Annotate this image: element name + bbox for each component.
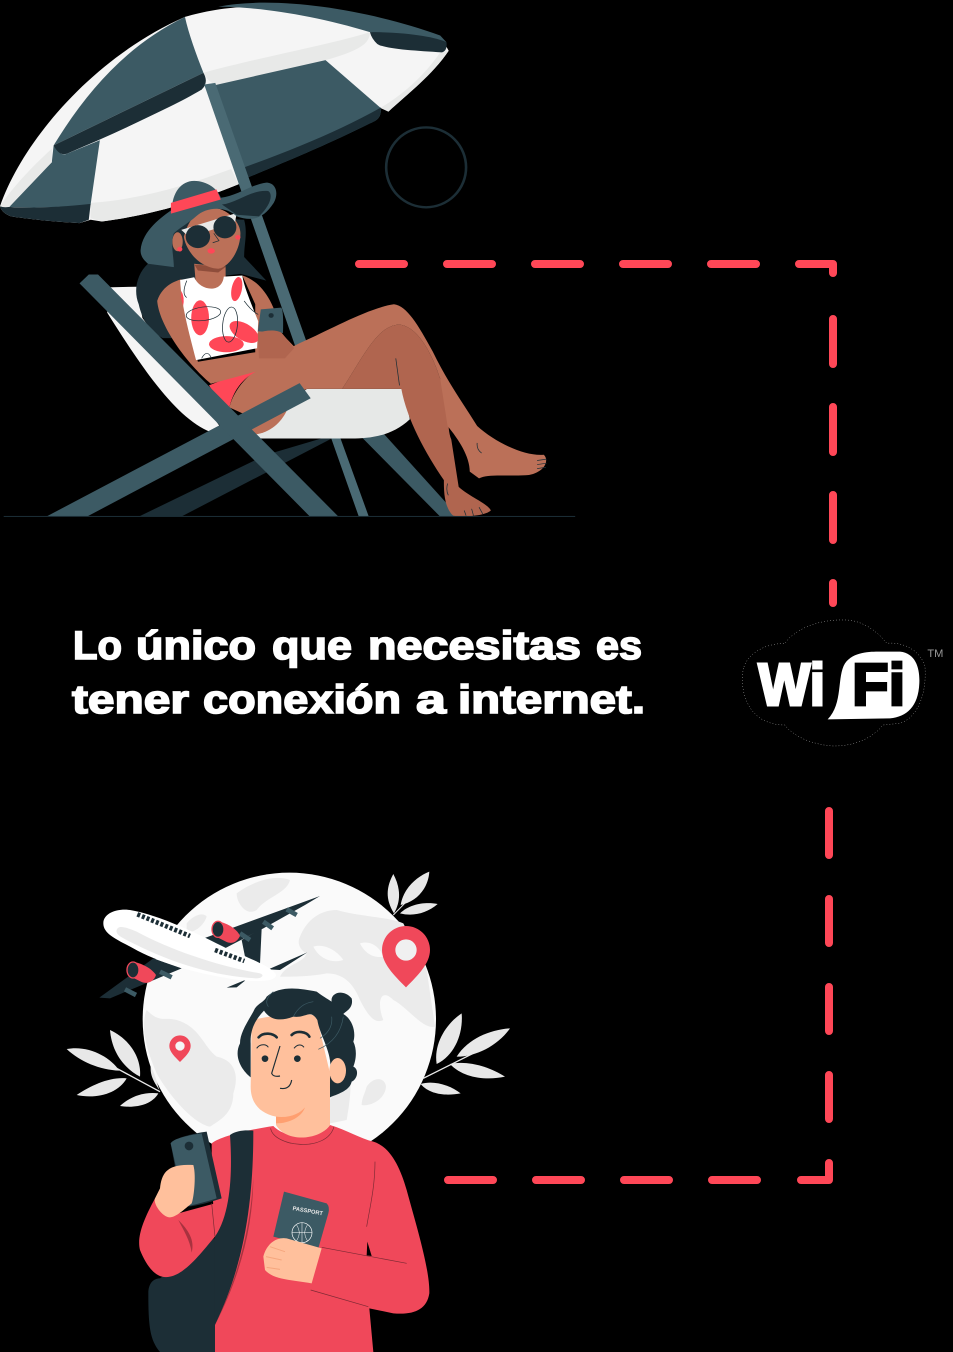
headline: es — [596, 624, 642, 668]
head — [238, 989, 357, 1138]
toes and leg details — [396, 358, 547, 516]
headline: Lo — [73, 624, 122, 668]
fuselage — [103, 910, 276, 981]
speech bubble — [828, 652, 919, 719]
leaves: left — [67, 1030, 160, 1107]
torso and arms — [157, 264, 294, 384]
headline: único — [136, 624, 256, 668]
pylons — [125, 909, 297, 995]
sun hat — [141, 181, 276, 267]
headline: tener — [72, 678, 189, 722]
swimsuit bottom — [209, 358, 272, 407]
umbrella pole — [204, 83, 369, 517]
icon: large location pin — [382, 926, 430, 987]
red sweater — [139, 1125, 429, 1352]
leaves: top right — [388, 872, 438, 915]
airplane — [99, 896, 320, 998]
umbrella canopy — [0, 3, 449, 223]
phone — [258, 308, 283, 333]
headline: conexión — [203, 678, 401, 722]
illustration: traveller with globe — [67, 872, 510, 1352]
globe — [143, 873, 436, 1166]
Wi: Wi — [758, 651, 825, 718]
trademark: TM — [927, 648, 943, 660]
hand holding phone — [258, 330, 294, 358]
chair seat cloth — [107, 287, 410, 439]
patterned top — [180, 276, 263, 360]
hand holding passport — [263, 1238, 322, 1283]
passport — [273, 1192, 329, 1248]
leaves: right — [421, 1013, 510, 1095]
headline: necesitas — [368, 624, 581, 668]
engines — [216, 922, 240, 943]
wings and tail — [190, 896, 320, 954]
dashed connector: bottom — [448, 811, 829, 1180]
icon: small location pin — [169, 1035, 191, 1062]
face features — [259, 1032, 309, 1037]
phone in hand — [171, 1132, 222, 1207]
hair — [136, 216, 266, 338]
chair main bar — [80, 275, 338, 517]
passport: PASSPORT — [292, 1206, 324, 1217]
headline: a — [416, 678, 447, 722]
hair — [238, 989, 357, 1097]
dashed connector: top — [359, 264, 833, 603]
icon: Wi-Fi logo — [742, 620, 943, 746]
backpack — [148, 1237, 217, 1352]
chair back legs — [139, 433, 459, 517]
Fi: Fi — [852, 651, 905, 718]
headline — [72, 624, 645, 722]
outlined circle — [386, 127, 466, 207]
illustration: woman under beach umbrella — [0, 3, 575, 517]
headline: que — [272, 624, 352, 668]
back leg — [342, 325, 491, 516]
ground line — [4, 516, 575, 517]
backpack strap — [215, 1130, 253, 1325]
armrest — [46, 383, 311, 517]
headline: internet. — [458, 678, 645, 722]
head — [172, 208, 240, 269]
front leg — [229, 304, 546, 478]
hand holding phone — [155, 1165, 195, 1217]
buttock under armrest — [237, 411, 287, 434]
